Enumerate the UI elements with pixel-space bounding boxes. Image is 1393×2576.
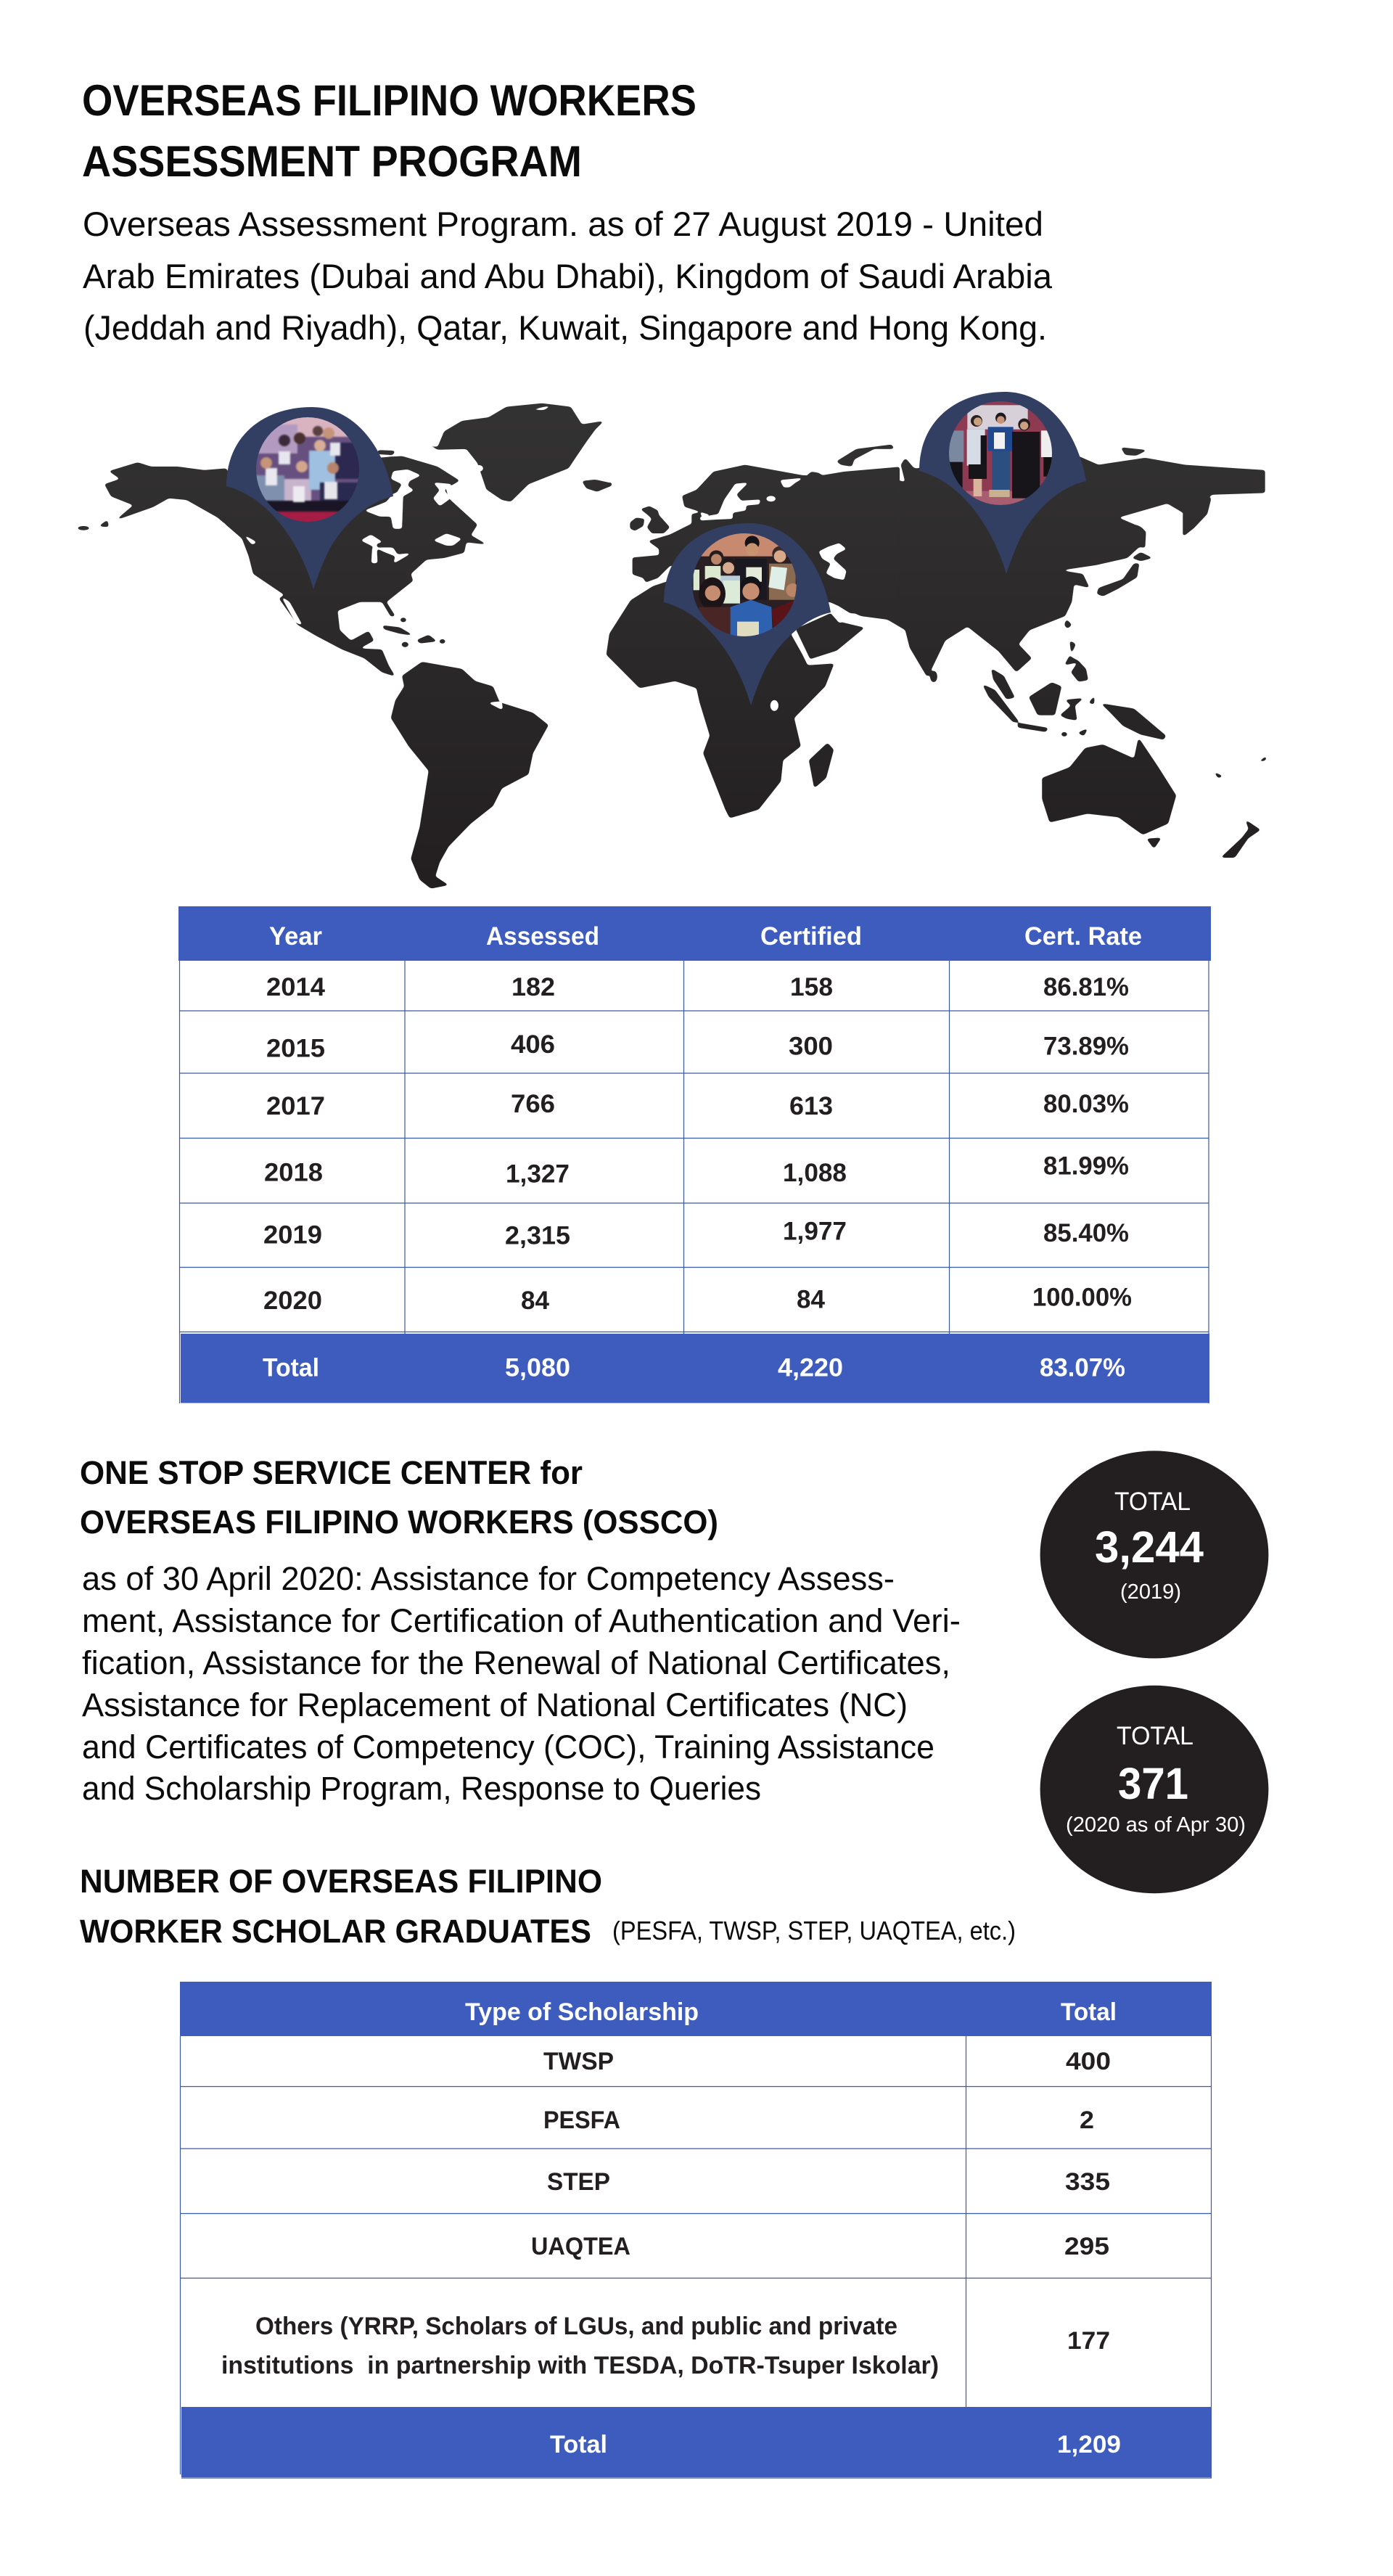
table body rows <box>263 973 1132 1315</box>
scholarship table header: Total <box>1061 1998 1117 2026</box>
stat circle: total 2019 <box>1040 1451 1268 1658</box>
table grid <box>180 961 1209 1403</box>
scholarship table header <box>180 1982 1212 2036</box>
table body rows: 86.81% <box>1043 973 1129 1001</box>
table body rows: 2019 <box>263 1221 322 1250</box>
heading: scholar graduates: WORKER SCHOLAR GRADUATES <box>80 1913 591 1950</box>
table body rows: 158 <box>790 973 833 1001</box>
table header row: Assessed <box>486 922 599 951</box>
pin: Africa and Middle East <box>664 523 831 705</box>
stat circle: total 2019: TOTAL <box>1114 1488 1191 1516</box>
table total row: 4,220 <box>778 1354 843 1382</box>
OSSCO description text: Assistance for Replacement of National Certificates (NC) <box>82 1686 908 1723</box>
eurasia and oceania <box>723 433 1267 858</box>
table header row: Cert. Rate <box>1024 922 1142 951</box>
scholarship table body: UAQTEA <box>531 2233 630 2260</box>
OSSCO description text: as of 30 April 2020: Assistance for Competency Assess- <box>82 1560 895 1597</box>
table header row <box>178 906 1211 961</box>
scholarship table body: Others (YRRP, Scholars of LGUs, and public and private <box>255 2313 897 2340</box>
scholarship table body: 400 <box>1066 2048 1111 2075</box>
photo: graduates holding certificates <box>692 533 797 636</box>
title: ASSESSMENT PROGRAM <box>82 137 582 186</box>
heading: OSSCO: OVERSEAS FILIPINO WORKERS (OSSCO) <box>80 1504 718 1541</box>
table total row <box>181 1334 1209 1403</box>
stat circle: total 2019: 3,244 <box>1095 1522 1204 1572</box>
table body rows: 2017 <box>266 1092 325 1120</box>
table: scholarship types <box>180 1982 1212 2478</box>
europe and middle east <box>582 465 900 659</box>
table body rows: 766 <box>511 1090 555 1118</box>
pin: North America <box>226 407 393 589</box>
table body rows: 73.89% <box>1043 1032 1129 1061</box>
scholarship table header: Type of Scholarship <box>465 1998 699 2026</box>
heading: scholar graduates <box>80 1863 1016 1950</box>
scholarship table body: 177 <box>1067 2327 1110 2355</box>
OSSCO description text: and Scholarship Program, Response to Queries <box>82 1770 761 1807</box>
stat circle: total 2020: TOTAL <box>1117 1722 1193 1750</box>
table body rows: 1,977 <box>783 1218 847 1245</box>
stat circle: total 2020: (2020 as of Apr 30) <box>1066 1813 1246 1837</box>
table body rows: 2015 <box>266 1035 325 1062</box>
table body rows: 613 <box>789 1092 833 1120</box>
table body rows: 406 <box>511 1030 555 1059</box>
world map <box>78 403 1267 889</box>
intro text block: Overseas Assessment Program. as of 27 August 2019 - United <box>83 205 1043 243</box>
eurasian and african water details <box>700 477 866 711</box>
table header row: Year <box>269 922 322 951</box>
americas, greenland and africa <box>78 403 834 889</box>
table total row: 5,080 <box>505 1354 570 1382</box>
intro text block: Arab Emirates (Dubai and Abu Dhabi), Kingdom of Saudi Arabia <box>83 257 1053 295</box>
scholarship table body: PESFA <box>543 2107 620 2134</box>
heading: OSSCO: ONE STOP SERVICE CENTER for <box>80 1454 583 1491</box>
title <box>82 76 696 186</box>
scholarship table total row: 1,209 <box>1057 2431 1121 2458</box>
OSSCO description text: and Certificates of Competency (COC), Training Assistance <box>82 1728 934 1765</box>
scholarship table body: STEP <box>547 2168 610 2196</box>
table body rows: 182 <box>511 973 555 1001</box>
table body rows: 2020 <box>263 1287 322 1315</box>
table body rows: 100.00% <box>1032 1283 1132 1312</box>
table body rows: 85.40% <box>1043 1219 1129 1247</box>
scholarship table body: TWSP <box>543 2048 614 2075</box>
table total row: 83.07% <box>1040 1354 1125 1382</box>
heading: OSSCO <box>80 1454 718 1541</box>
intro text block: (Jeddah and Riyadh), Qatar, Kuwait, Singapore and Hong Kong. <box>83 308 1047 347</box>
scholarship table total row <box>181 2407 1212 2477</box>
title: OVERSEAS FILIPINO WORKERS <box>82 76 696 125</box>
north american water details <box>221 405 553 710</box>
photo: group at certificate ceremony <box>949 401 1052 505</box>
table body rows: 2,315 <box>505 1222 570 1250</box>
scholarship table body: 335 <box>1065 2168 1110 2196</box>
table body rows: 300 <box>789 1032 833 1061</box>
stat circle: total 2020: 371 <box>1118 1759 1188 1808</box>
OSSCO description text: fication, Assistance for the Renewal of National Certificates, <box>82 1644 950 1681</box>
table body rows: 2018 <box>264 1158 323 1187</box>
OSSCO description text: ment, Assistance for Certification of Authentication and Veri- <box>82 1602 961 1639</box>
OSSCO description text <box>82 1560 961 1807</box>
scholarship table body: 295 <box>1064 2233 1109 2260</box>
table header row: Certified <box>760 922 862 951</box>
table body rows: 81.99% <box>1043 1152 1129 1180</box>
intro text block <box>83 205 1053 347</box>
infographic canvas <box>78 84 1268 2479</box>
table body rows: 1,088 <box>783 1159 847 1187</box>
photo: graduates in North America <box>256 417 359 522</box>
stat circle: total 2019: (2019) <box>1120 1580 1181 1604</box>
stat circle: total 2020 <box>1040 1686 1268 1893</box>
heading: scholar graduates: NUMBER OF OVERSEAS FILIPINO <box>80 1863 602 1900</box>
scholarship table body: 2 <box>1080 2107 1094 2134</box>
table body rows: 84 <box>797 1286 826 1313</box>
table body rows: 2014 <box>266 973 326 1001</box>
pin: Middle East <box>919 392 1086 574</box>
scholarship table total row: Total <box>550 2431 607 2458</box>
table body rows: 84 <box>521 1287 550 1315</box>
table total row: Total <box>263 1354 319 1382</box>
table body rows: 1,327 <box>506 1160 570 1189</box>
table: assessment results by year <box>178 906 1211 1403</box>
table body rows: 80.03% <box>1043 1090 1129 1118</box>
scholarship table body: institutions in partnership with TESDA, DoTR-Tsuper Iskolar) <box>221 2352 939 2379</box>
scholarship table body <box>221 2048 1111 2379</box>
heading: scholar graduates: (PESFA, TWSP, STEP, UAQTEA, etc.) <box>612 1916 1016 1945</box>
scholarship table grid <box>180 2036 1212 2478</box>
